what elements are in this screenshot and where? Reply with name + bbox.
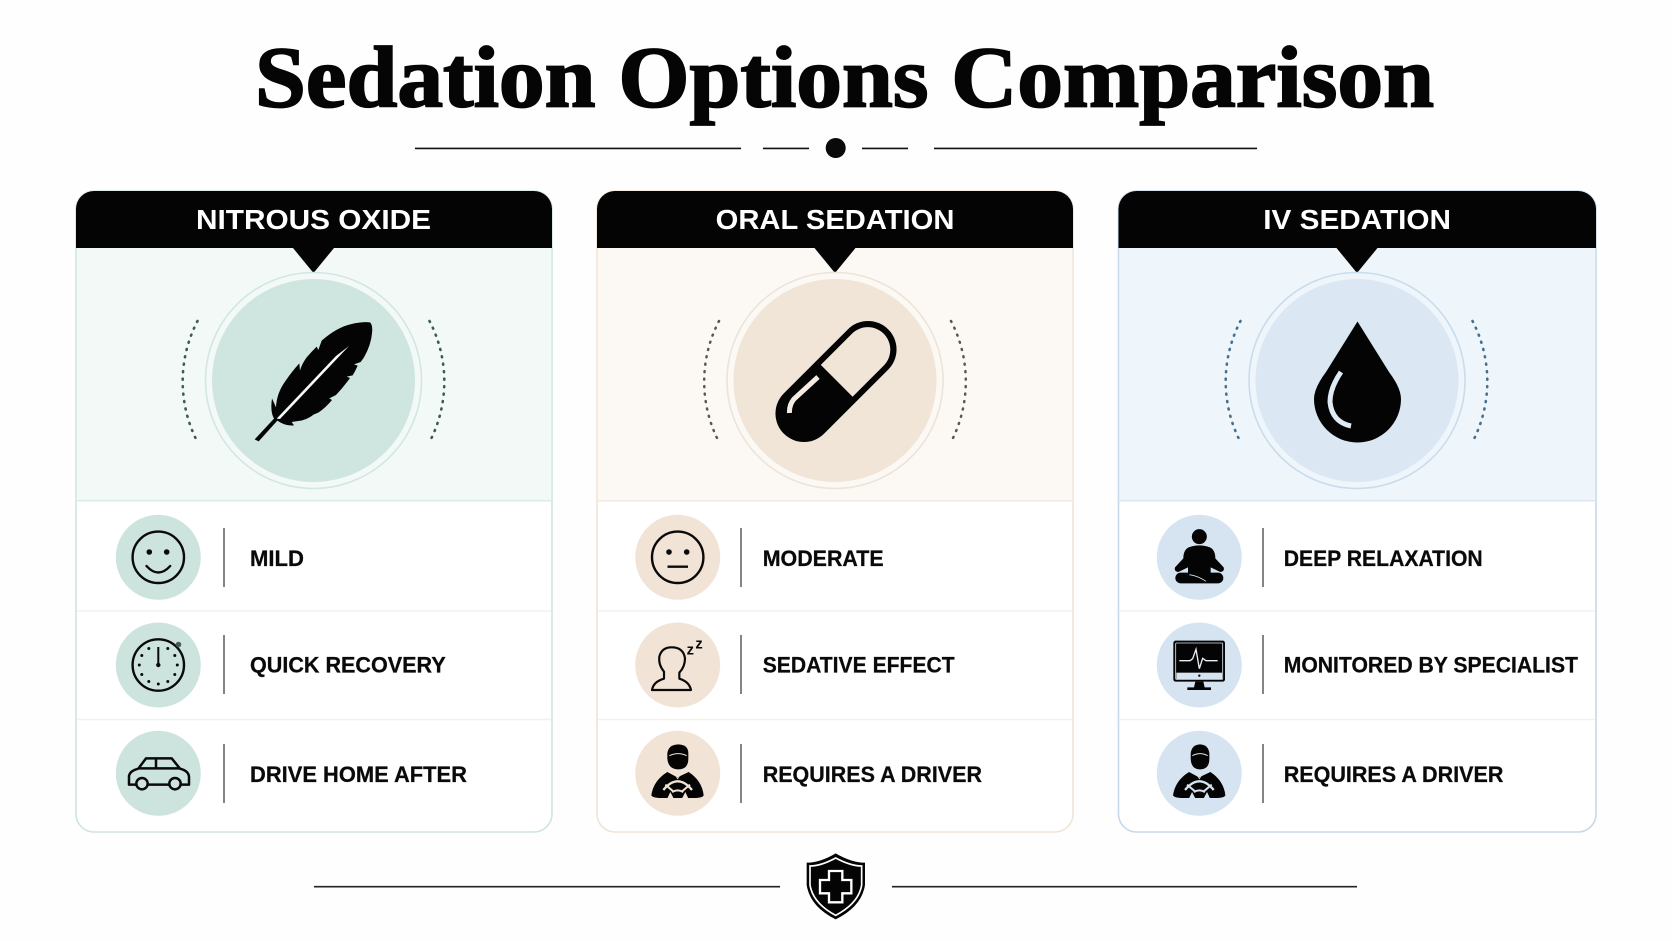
icon: meditating person xyxy=(1157,515,1242,600)
label: sedative effect: SEDATIVE EFFECT xyxy=(763,653,955,678)
icon: capsule xyxy=(764,309,908,454)
label: quick recovery: QUICK RECOVERY xyxy=(250,653,446,678)
label: requires a driver: REQUIRES A DRIVER xyxy=(763,762,982,787)
icon: car xyxy=(116,731,201,816)
hero circle: iv sedation xyxy=(1226,272,1487,488)
label: drive home after: DRIVE HOME AFTER xyxy=(250,762,467,787)
heading: iv sedation: IV SEDATION xyxy=(1263,204,1451,235)
heading: nitrous oxide: NITROUS OXIDE xyxy=(196,204,431,235)
panel: iv sedation xyxy=(1118,191,1596,832)
footer divider xyxy=(314,886,1357,888)
title divider xyxy=(415,138,1257,158)
icon: stopwatch xyxy=(116,622,201,708)
icon: medical shield xyxy=(807,853,865,919)
row: requires a driver xyxy=(635,731,982,816)
heading: nitrous oxide xyxy=(76,191,552,273)
heading: oral sedation: ORAL SEDATION xyxy=(716,204,954,235)
label: mild: MILD xyxy=(250,546,304,571)
icon: driver xyxy=(1157,731,1242,816)
icon: feather xyxy=(255,322,372,441)
row: requires a driver xyxy=(1157,731,1504,816)
icon: sleeping head: z xyxy=(687,643,694,659)
heading: oral sedation xyxy=(597,191,1073,273)
row: mild xyxy=(116,515,304,600)
row: quick recovery xyxy=(116,622,446,708)
label: requires a driver: REQUIRES A DRIVER xyxy=(1284,762,1504,787)
title: Sedation Options Comparison xyxy=(255,28,1434,126)
row: moderate xyxy=(635,515,884,600)
icon: monitor xyxy=(1157,622,1242,708)
label: deep relaxation: DEEP RELAXATION xyxy=(1284,546,1483,571)
icon: drop xyxy=(1314,322,1401,442)
row: sedative effect xyxy=(635,622,955,708)
panel: oral sedation xyxy=(597,191,1073,832)
row: monitored by specialist xyxy=(1157,622,1579,708)
label: monitored by specialist: MONITORED BY SPECIALIST xyxy=(1284,653,1579,678)
icon: sleeping head: z xyxy=(695,637,703,653)
icon: sleeping head xyxy=(635,622,720,708)
hero circle: nitrous oxide xyxy=(183,272,444,488)
label: moderate: MODERATE xyxy=(763,546,884,571)
panel: nitrous oxide xyxy=(76,191,552,832)
heading: iv sedation xyxy=(1118,191,1596,273)
icon: smiley xyxy=(116,515,201,600)
hero circle: oral sedation xyxy=(704,272,966,488)
icon: neutral face xyxy=(635,515,720,600)
icon: driver xyxy=(635,731,720,816)
row: deep relaxation xyxy=(1157,515,1483,600)
row: drive home after xyxy=(116,731,467,816)
